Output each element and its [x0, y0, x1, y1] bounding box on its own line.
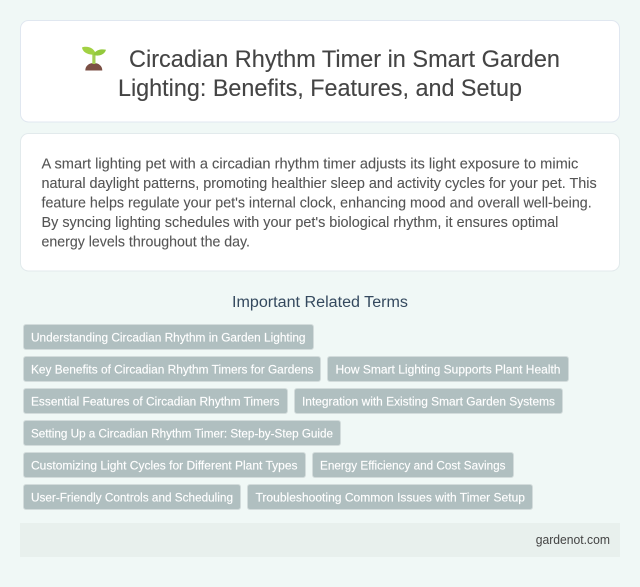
- text block: description: [42, 156, 597, 250]
- heading: important related terms: Important Related Terms: [232, 294, 408, 311]
- panel: description: [20, 134, 620, 271]
- text block: description: natural daylight patterns, promoting healthier sleep and activity cycles for your pet. This: [42, 176, 597, 192]
- tag: key benefits: Key Benefits of Circadian Rhythm Timers for Gardens: [31, 362, 314, 376]
- tag: understanding circadian rhythm: Understanding Circadian Rhythm in Garden Lighting: [31, 330, 306, 344]
- tag: energy efficiency: [312, 452, 514, 478]
- footer: gardenot.com: [536, 533, 610, 547]
- tag: essential features: Essential Features of Circadian Rhythm Timers: [31, 394, 280, 408]
- panel: title header: [20, 20, 620, 122]
- heading: title: Lighting: Benefits, Features, and Setup: [118, 75, 522, 102]
- tag: troubleshooting: [248, 484, 532, 510]
- heading: title: Circadian Rhythm Timer in Smart Garden: [129, 46, 560, 73]
- tag: customizing: Customizing Light Cycles for Different Plant Types: [31, 458, 298, 472]
- tag: user-friendly: User-Friendly Controls and Scheduling: [31, 490, 233, 504]
- text block: description: energy levels throughout the day.: [42, 234, 250, 250]
- heading: title: [118, 46, 560, 102]
- tag: setting up: [24, 420, 340, 446]
- tag: setting up: Setting Up a Circadian Rhythm Timer: Step-by-Step Guide: [31, 426, 333, 440]
- tag: integration: [294, 388, 562, 414]
- tag: customizing: [24, 452, 306, 478]
- text block: description: A smart lighting pet with a circadian rhythm timer adjusts its light exposure to mimic: [42, 156, 579, 172]
- text block: description: By syncing lighting schedules with your pet's biological rhythm, it ensures optimal: [42, 215, 558, 231]
- tag: essential features: [24, 388, 288, 414]
- tag: troubleshooting: Troubleshooting Common Issues with Timer Setup: [256, 490, 525, 504]
- panel: related terms tags: [24, 324, 568, 510]
- tag: key benefits: [24, 356, 320, 382]
- tag: plant health: [328, 356, 568, 382]
- tag: energy efficiency: Energy Efficiency and Cost Savings: [320, 458, 506, 472]
- tag: integration: Integration with Existing Smart Garden Systems: [302, 394, 555, 408]
- text block: description: feature helps regulate your pet's internal clock, enhancing mood and overall well-being.: [42, 196, 592, 212]
- icon: seedling: [82, 47, 106, 70]
- tag: user-friendly: [24, 484, 240, 510]
- footer: [20, 523, 620, 557]
- tag: plant health: How Smart Lighting Supports Plant Health: [336, 362, 561, 376]
- tag: understanding circadian rhythm: [24, 324, 314, 350]
